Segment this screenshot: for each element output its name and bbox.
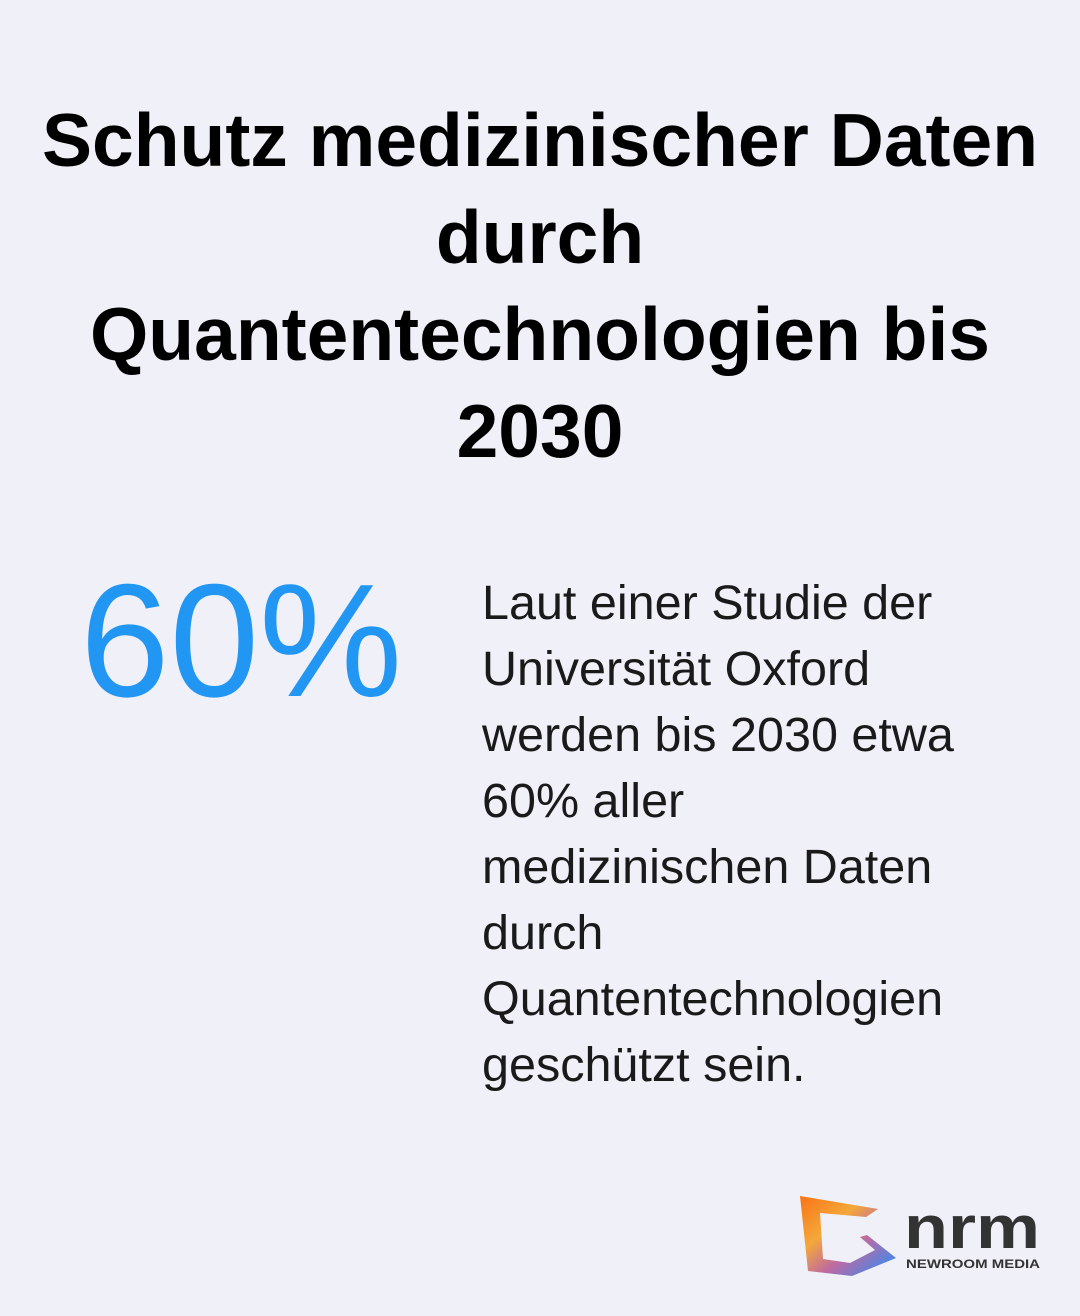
description text: werden bis 2030 etwa (482, 708, 954, 762)
description text: Universität Oxford (482, 642, 870, 696)
icon: logo mark (800, 1196, 896, 1276)
title: durch (436, 195, 644, 279)
logo wordmark: nrm (904, 1194, 1040, 1261)
logo: newroom media (800, 1194, 1040, 1276)
description text: Laut einer Studie der (482, 576, 932, 630)
title: Schutz medizinischer Daten (42, 98, 1038, 182)
description text: geschützt sein. (482, 1038, 806, 1092)
description text (482, 576, 954, 1092)
big stat: 60%: 60% (80, 551, 402, 731)
logo wordmark: NEWROOM MEDIA (906, 1257, 1040, 1271)
description text: Quantentechnologien (482, 972, 943, 1026)
title (42, 98, 1038, 473)
title: 2030 (457, 389, 623, 473)
description text: durch (482, 906, 603, 960)
title: Quantentechnologien bis (90, 292, 990, 376)
description text: medizinischen Daten (482, 840, 932, 894)
description text: 60% aller (482, 774, 684, 828)
